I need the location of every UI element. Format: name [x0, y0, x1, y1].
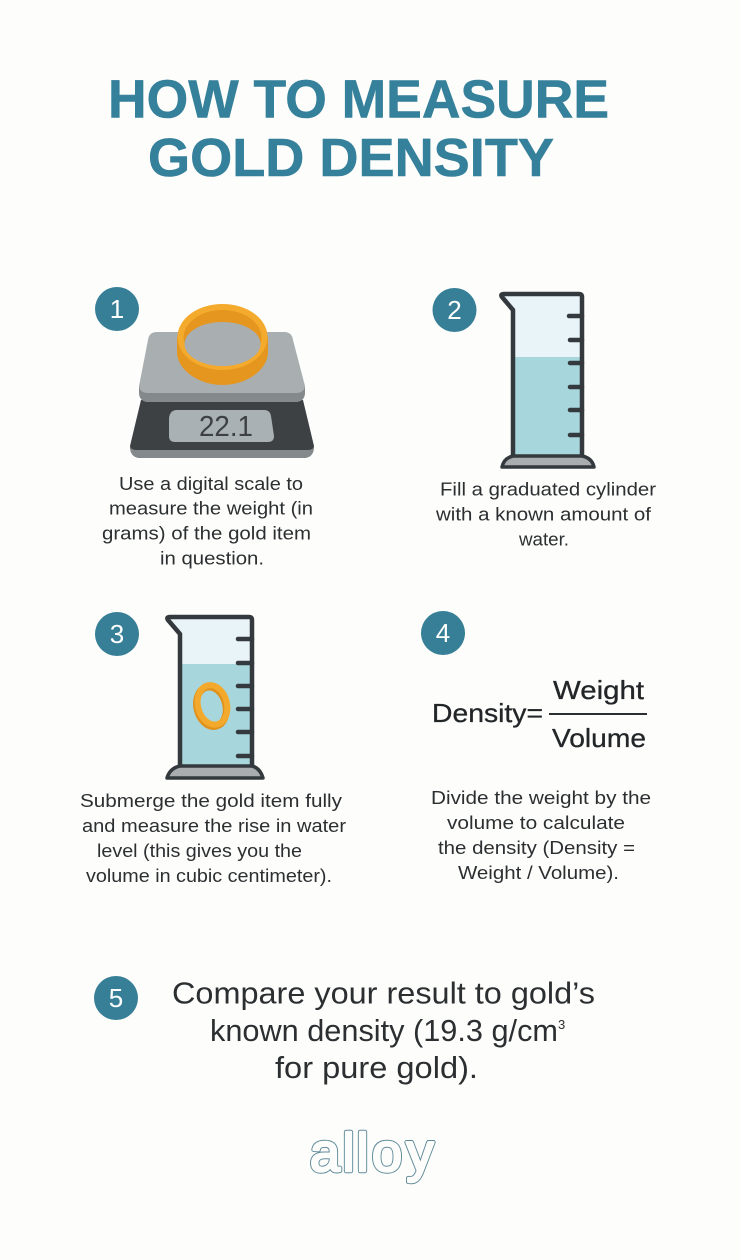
step number 1: 1 — [110, 294, 124, 324]
icon: digital scale with gold ring — [130, 304, 314, 458]
gold ring — [177, 304, 268, 385]
density formula: Volume — [552, 723, 646, 753]
step 4 text — [431, 787, 651, 883]
step 3 text: level (this gives you the — [97, 840, 302, 861]
step number 5 — [94, 976, 138, 1020]
step 3 text: volume in cubic centimeter). — [86, 865, 332, 886]
step 1 text: Use a digital scale to — [119, 473, 303, 494]
step number 3 — [95, 612, 139, 656]
step 1 text — [102, 473, 313, 568]
step number 5: 5 — [109, 983, 123, 1013]
step 5 text: 3 — [558, 1017, 565, 1032]
step 3 text: Submerge the gold item fully — [80, 790, 343, 811]
step number 3: 3 — [110, 619, 124, 649]
step number 4: 4 — [436, 618, 450, 648]
step number 4 — [421, 611, 465, 655]
icon: graduated cylinder with water — [501, 294, 594, 467]
panel: step 3 — [80, 612, 346, 886]
step 2 text: Fill a graduated cylinder — [440, 478, 656, 500]
logo: alloy: alloy — [310, 1123, 434, 1183]
step 1 text: grams) of the gold item — [102, 522, 311, 544]
step 5 text: for pure gold). — [275, 1051, 478, 1085]
step 3 text: and measure the rise in water — [82, 815, 346, 836]
step 4 text: Weight / Volume). — [458, 862, 619, 883]
title — [108, 70, 609, 188]
icon: cylinder with submerged gold ring — [167, 617, 263, 778]
step 4 text: Divide the weight by the — [431, 787, 651, 808]
step 3 text — [80, 790, 346, 886]
step 2 text: with a known amount of — [435, 504, 652, 524]
panel: step 4 — [421, 611, 651, 883]
panel: step 1 — [95, 287, 314, 568]
step number 1 — [95, 287, 139, 331]
gold ring — [192, 682, 232, 730]
panel: step 2 — [432, 288, 656, 550]
logo: alloy: alloy — [310, 1123, 434, 1183]
density formula: Density= — [432, 698, 543, 728]
step number 2: 2 — [447, 295, 462, 325]
step 2 text: water. — [518, 528, 569, 550]
title: HOW TO MEASURE — [108, 70, 609, 130]
step 5 text — [172, 976, 595, 1085]
step 2 text — [435, 478, 656, 550]
icon: digital scale with gold ring: 22.1 — [199, 411, 253, 443]
step 1 text: in question. — [160, 548, 264, 568]
step number 2 — [432, 288, 476, 332]
step 4 text: the density (Density = — [438, 837, 635, 858]
density formula: Weight — [553, 675, 645, 705]
step 5 text: Compare your result to gold’s — [172, 976, 595, 1010]
panel: step 5 — [94, 976, 595, 1085]
step 1 text: measure the weight (in — [109, 498, 313, 518]
density formula — [432, 675, 647, 753]
step 4 text: volume to calculate — [447, 812, 625, 833]
step 5 text: known density (19.3 g/cm — [210, 1014, 558, 1048]
title: GOLD DENSITY — [148, 129, 554, 188]
